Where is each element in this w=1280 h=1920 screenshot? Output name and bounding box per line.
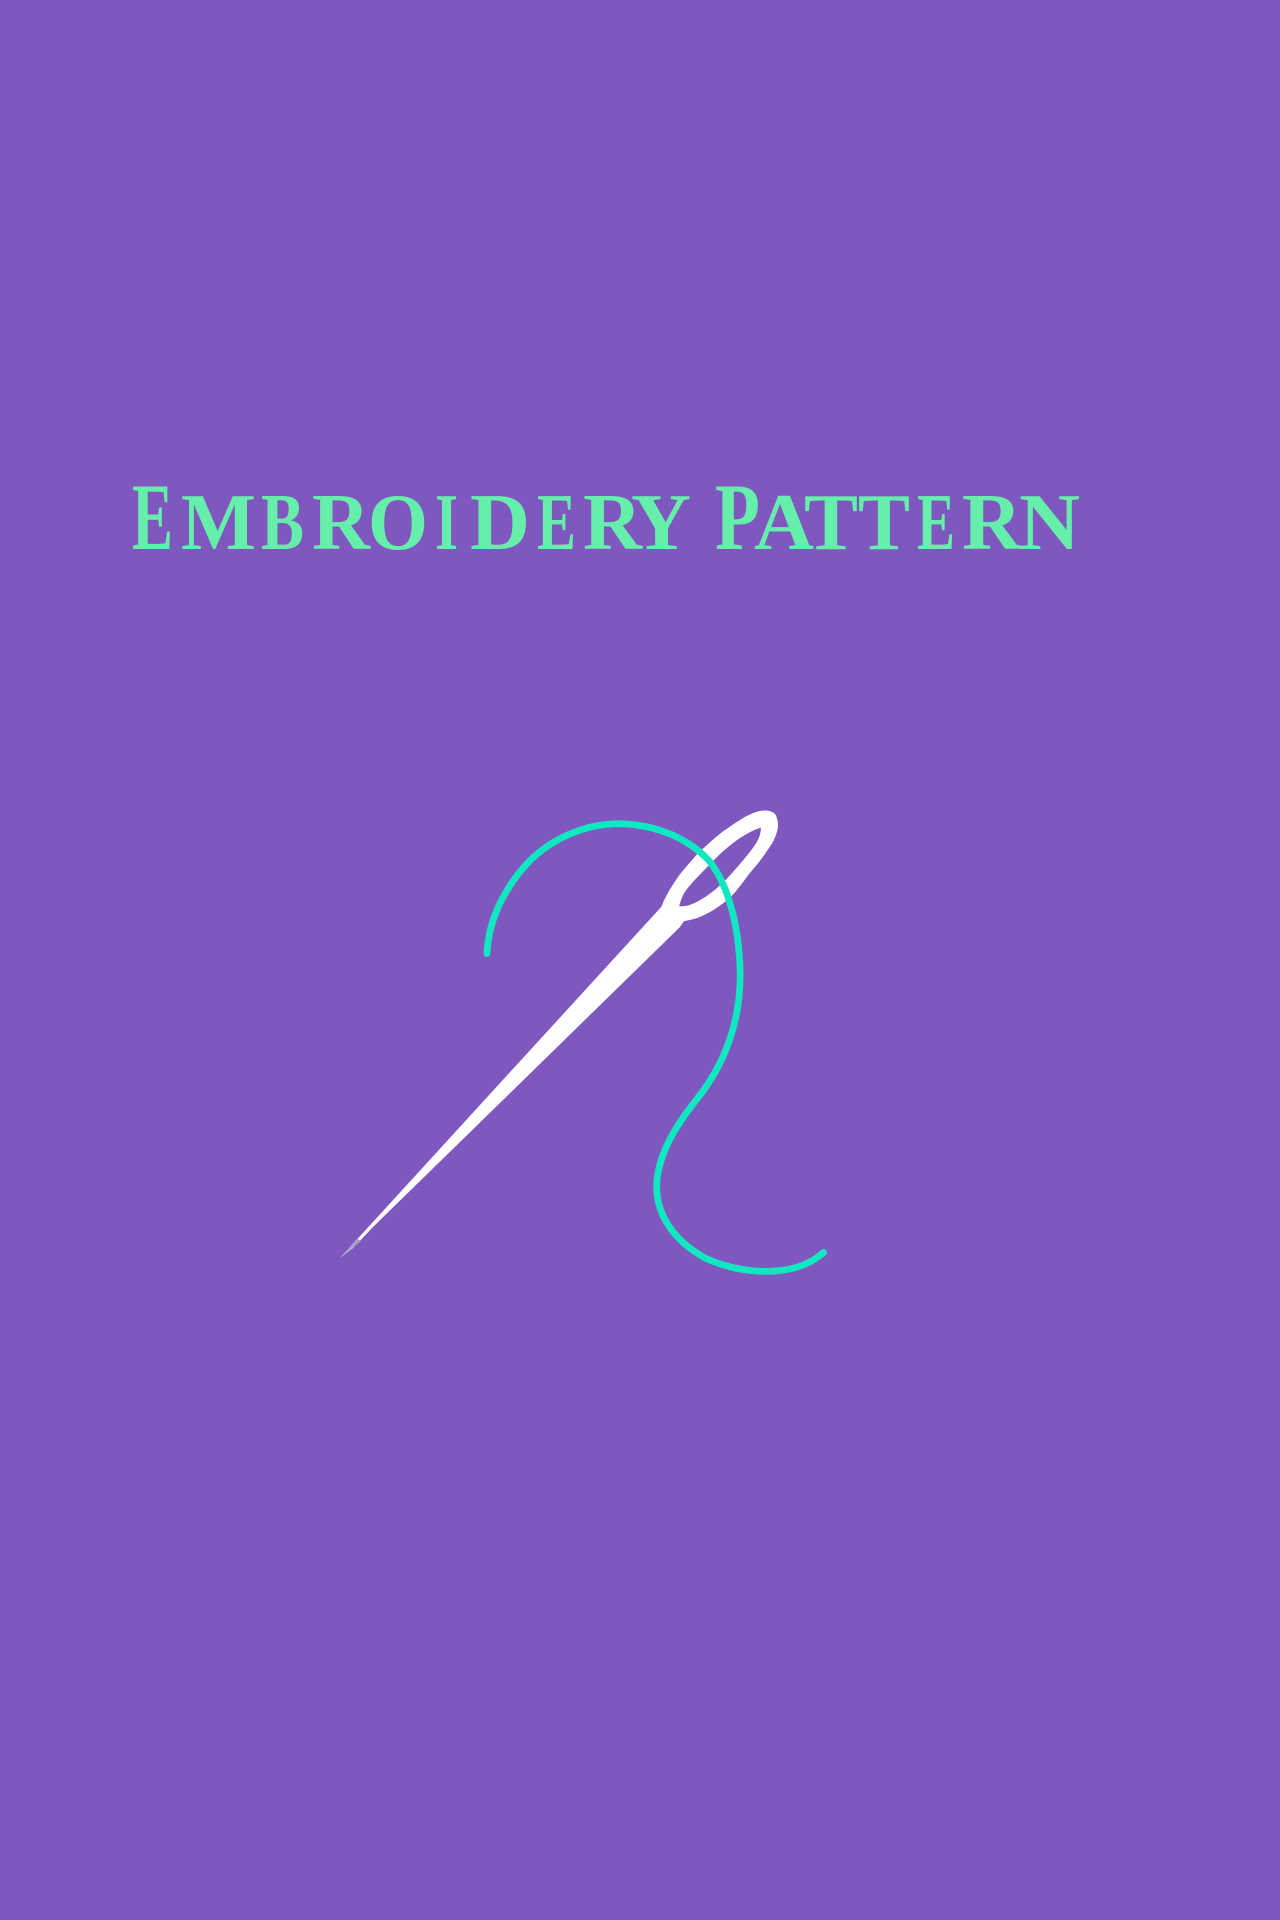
title: D [470,477,530,567]
title: R [583,477,644,567]
icon: thread [487,824,824,1271]
title: R [312,477,371,567]
title: P [715,464,760,570]
title: T [858,477,910,567]
title: M [181,477,256,567]
title: E [537,477,576,567]
title: B [261,477,304,567]
illustration: needle and thread [340,811,824,1271]
title: A [754,477,814,567]
title: E [917,477,955,567]
needle tip shading [340,1239,361,1258]
title: E [132,464,173,570]
title: R [962,477,1024,567]
title: N [1019,477,1080,567]
title: Y [631,477,690,567]
needle shaft [340,898,690,1258]
title: O [368,477,428,567]
title [132,464,1080,570]
needle eye outer [662,811,778,922]
icon: needle [340,811,778,1258]
needle eye hole [678,826,762,907]
title: I [435,477,458,567]
title: T [804,477,858,567]
